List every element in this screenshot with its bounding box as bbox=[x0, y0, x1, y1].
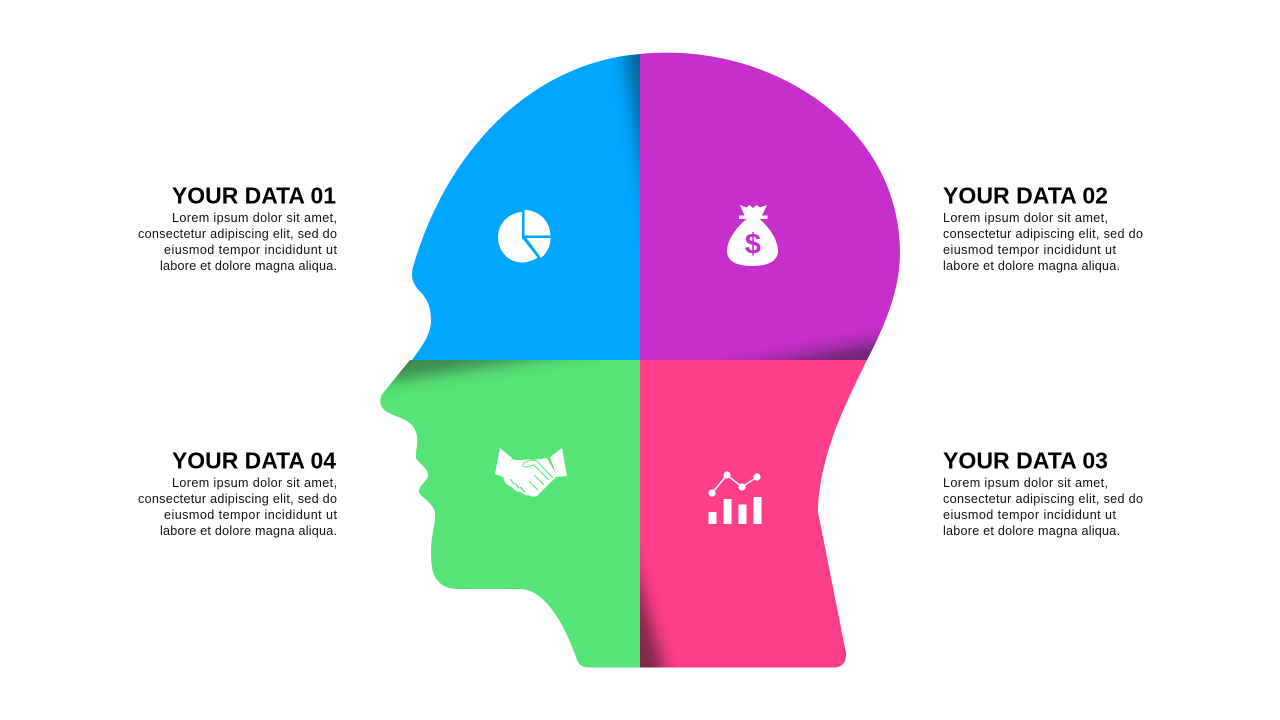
icon: handshake bbox=[495, 448, 567, 497]
text block: your data 02 bbox=[943, 182, 1143, 273]
text block: your data 01: consectetur adipiscing elit, sed do bbox=[138, 227, 337, 241]
text block: your data 04: YOUR DATA 04 bbox=[172, 448, 336, 474]
text block: your data 01: eiusmod tempor incididunt ut bbox=[164, 243, 338, 257]
icon: pie chart bbox=[498, 210, 550, 262]
text block: your data 01: YOUR DATA 01 bbox=[172, 182, 336, 208]
text block: your data 03: YOUR DATA 03 bbox=[943, 448, 1108, 474]
text block: your data 02: Lorem ipsum dolor sit amet, bbox=[943, 211, 1108, 225]
icon: line and bar chart bbox=[708, 471, 762, 524]
text block: your data 02: YOUR DATA 02 bbox=[943, 182, 1108, 208]
text block: your data 02: labore et dolore magna aliqua. bbox=[943, 259, 1120, 273]
panel: quadrant 04 green bbox=[380, 360, 640, 668]
panel: quadrant 02 purple bbox=[640, 52, 900, 360]
text block: your data 01 bbox=[138, 182, 338, 273]
text block: your data 04: Lorem ipsum dolor sit amet, bbox=[172, 476, 337, 490]
text block: your data 02: consectetur adipiscing elit, sed do bbox=[943, 227, 1143, 241]
text block: your data 03: labore et dolore magna aliqua. bbox=[943, 524, 1120, 538]
text block: your data 03: eiusmod tempor incididunt ut bbox=[943, 508, 1116, 522]
text block: your data 03 bbox=[943, 448, 1143, 538]
text block: your data 02: eiusmod tempor incididunt ut bbox=[943, 243, 1116, 257]
text block: your data 01: Lorem ipsum dolor sit amet, bbox=[172, 211, 337, 225]
text block: your data 01: labore et dolore magna aliqua. bbox=[160, 259, 337, 273]
text block: your data 04: consectetur adipiscing elit, sed do bbox=[138, 492, 337, 506]
text block: your data 03: consectetur adipiscing elit, sed do bbox=[943, 492, 1143, 506]
head silhouette bbox=[370, 30, 910, 685]
panel: quadrant 01 blue bbox=[412, 54, 640, 360]
text block: your data 04: labore et dolore magna aliqua. bbox=[160, 524, 337, 538]
text block: your data 04: eiusmod tempor incididunt ut bbox=[164, 508, 338, 522]
text block: your data 03: Lorem ipsum dolor sit amet, bbox=[943, 476, 1108, 490]
text block: your data 04 bbox=[138, 448, 338, 538]
icon: money bag: $ bbox=[745, 228, 761, 260]
icon: money bag bbox=[727, 205, 778, 266]
panel: quadrant 03 pink bbox=[640, 360, 867, 668]
infographic canvas bbox=[138, 52, 1142, 668]
